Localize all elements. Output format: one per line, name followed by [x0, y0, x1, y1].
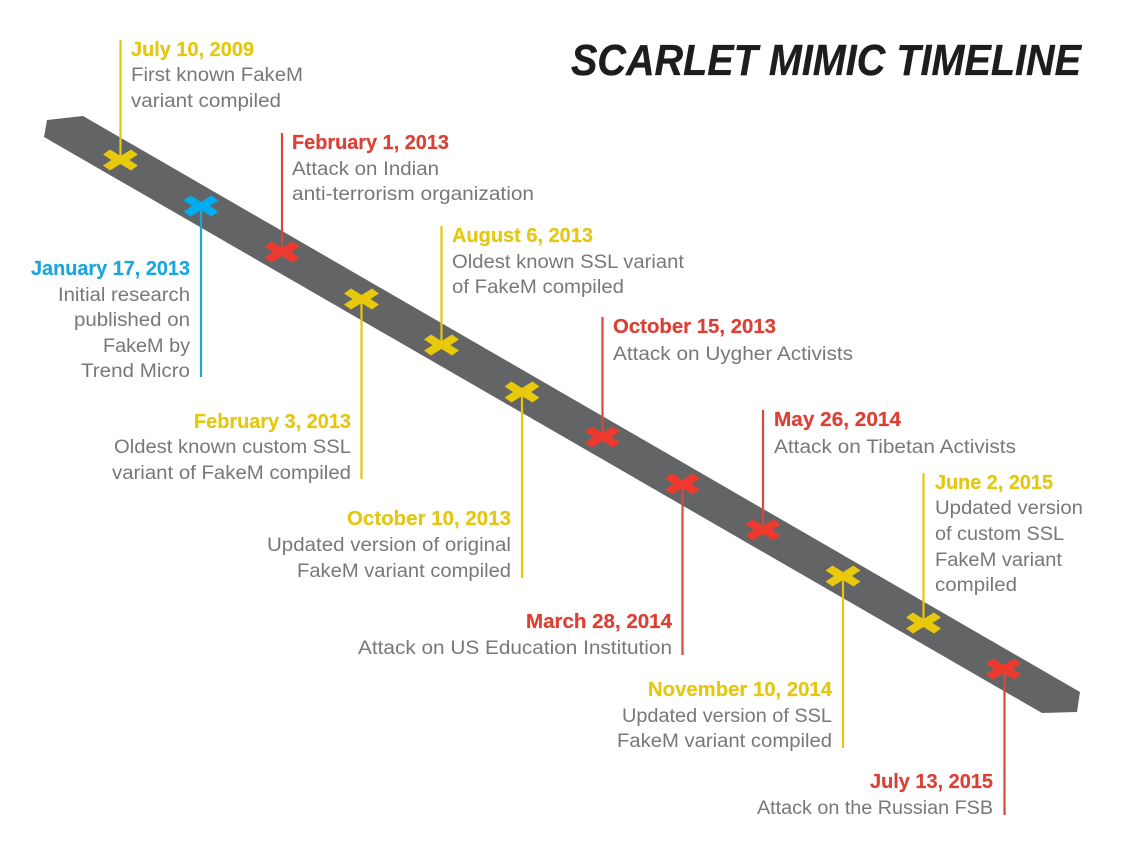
- event: July 10, 2009: [103, 39, 303, 170]
- event: March 28, 2014: [358, 474, 700, 659]
- event: August 6, 2013: August 6, 2013: [452, 225, 593, 247]
- event: July 13, 2015: July 13, 2015: [870, 771, 993, 793]
- event: November 10, 2014: Updated version of SSL: [622, 706, 832, 727]
- event: January 17, 2013: [31, 196, 218, 382]
- event: June 2, 2015: June 2, 2015: [935, 472, 1053, 494]
- event: October 10, 2013: [267, 382, 540, 582]
- event: November 10, 2014: FakeM variant compiled: [617, 731, 832, 752]
- event: June 2, 2015: [906, 472, 1083, 634]
- event: January 17, 2013: FakeM by: [103, 336, 191, 357]
- event: October 10, 2013: Updated version of original: [267, 535, 511, 556]
- event: October 10, 2013: FakeM variant compiled: [297, 561, 511, 582]
- event: February 1, 2013: February 1, 2013: [292, 132, 449, 154]
- event: August 6, 2013: of FakeM compiled: [452, 277, 624, 298]
- event: August 6, 2013: Oldest known SSL variant: [452, 252, 685, 273]
- event: January 17, 2013: January 17, 2013: [31, 258, 190, 280]
- event: February 3, 2013: [112, 288, 379, 484]
- event: May 26, 2014: [746, 409, 1016, 540]
- event: June 2, 2015: compiled: [935, 575, 1017, 596]
- event: February 1, 2013: anti-terrorism organization: [292, 184, 534, 205]
- event: July 10, 2009: variant compiled: [131, 91, 281, 112]
- event: January 17, 2013: Trend Micro: [81, 361, 190, 382]
- event: October 15, 2013: Attack on Uygher Activists: [613, 344, 853, 365]
- event: February 1, 2013: [264, 132, 534, 262]
- event: June 2, 2015: of custom SSL: [935, 524, 1064, 545]
- event: January 17, 2013: published on: [74, 310, 190, 331]
- event: October 10, 2013: October 10, 2013: [347, 508, 511, 530]
- event: November 10, 2014: November 10, 2014: [648, 679, 833, 701]
- title: SCARLET MIMIC TIMELINE: [571, 36, 1082, 85]
- diagonal timeline band: [44, 116, 1080, 713]
- event: July 13, 2015: [757, 658, 1021, 819]
- event: March 28, 2014: Attack on US Education Institution: [358, 638, 672, 659]
- event: March 28, 2014: March 28, 2014: [526, 611, 673, 633]
- event: January 17, 2013: Initial research: [58, 285, 190, 306]
- event: November 10, 2014: [617, 566, 860, 752]
- event: July 10, 2009: First known FakeM: [131, 65, 303, 86]
- event: May 26, 2014: Attack on Tibetan Activists: [774, 437, 1016, 458]
- event: July 10, 2009: July 10, 2009: [131, 39, 254, 61]
- event: August 6, 2013: [424, 225, 685, 356]
- event: July 13, 2015: Attack on the Russian FSB: [757, 798, 993, 819]
- event: May 26, 2014: May 26, 2014: [774, 409, 902, 431]
- event: June 2, 2015: FakeM variant: [935, 550, 1063, 571]
- event: October 15, 2013: October 15, 2013: [613, 316, 776, 338]
- event: October 15, 2013: [585, 316, 853, 448]
- event: June 2, 2015: Updated version: [935, 498, 1083, 519]
- event: February 3, 2013: variant of FakeM compiled: [112, 463, 351, 484]
- event: February 3, 2013: Oldest known custom SSL: [114, 437, 351, 458]
- event: February 1, 2013: Attack on Indian: [292, 159, 439, 180]
- event: February 3, 2013: February 3, 2013: [194, 411, 351, 433]
